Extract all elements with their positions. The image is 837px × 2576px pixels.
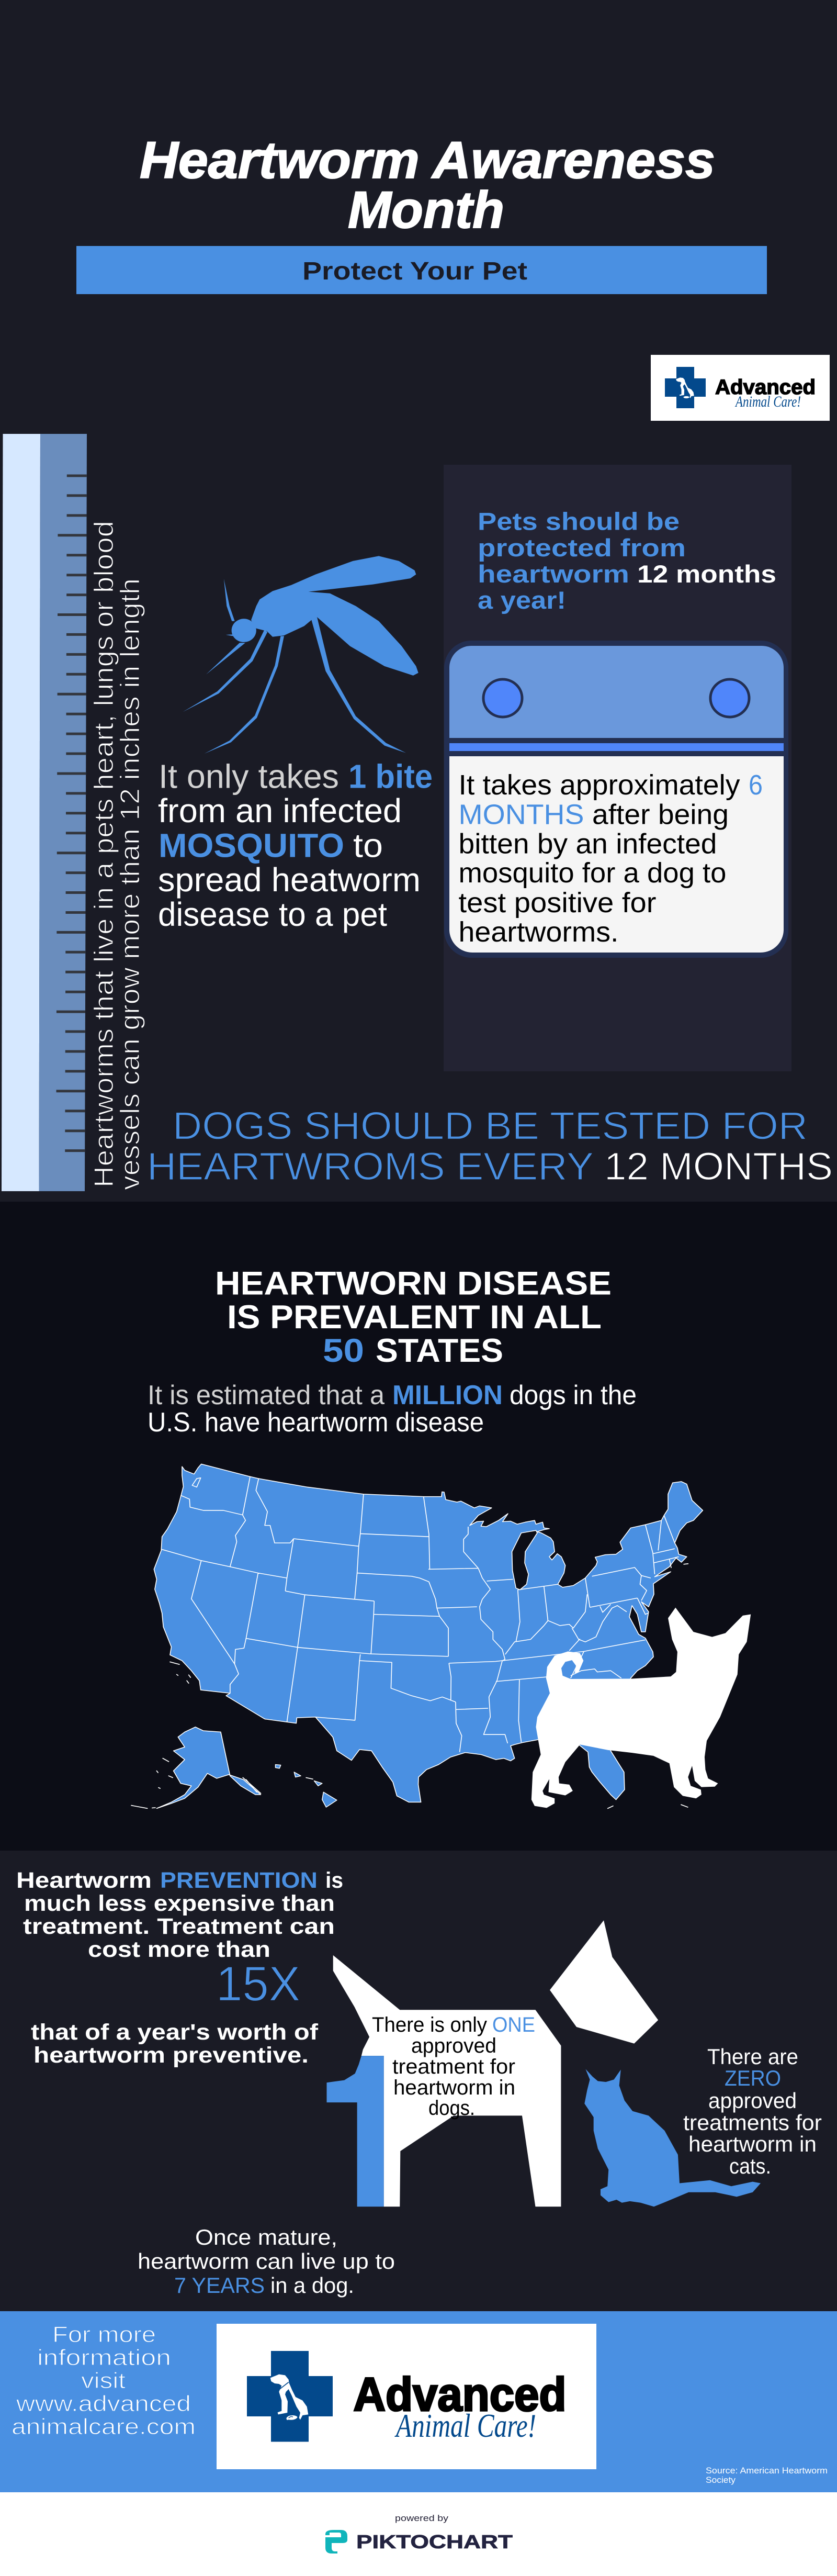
text: more information: www.advanced	[16, 2391, 191, 2416]
panel heading	[478, 508, 776, 614]
calendar text: mosquito for a dog to	[458, 857, 726, 889]
text: one approved treatment for dogs: heartworm in	[393, 2076, 515, 2099]
text: more information: For more	[52, 2322, 156, 2347]
calendar text: 6	[749, 769, 763, 801]
text: zero approved treatments for cats: treatments for	[683, 2110, 822, 2135]
logo: Advanced Animal Care (large)	[217, 2324, 596, 2469]
title	[140, 131, 715, 239]
text: source: Source: American Heartworm	[706, 2466, 828, 2476]
panel heading: 12 months	[637, 560, 776, 588]
text: one approved treatment for dogs	[372, 2013, 535, 2120]
logo: Advanced Animal Care (top): Animal Care!	[734, 393, 801, 410]
map: Hawaii	[276, 1765, 337, 1807]
text: 1 bite: MOSQUITO	[159, 827, 344, 865]
calendar	[444, 641, 788, 958]
map: Great Lakes	[512, 1530, 537, 1590]
text: more information: information	[37, 2345, 171, 2370]
heading: prevalent in all 50 states: IS PREVALENT IN ALL	[227, 1299, 602, 1336]
text: prevention is less expensive	[16, 1868, 343, 2068]
callout: test every 12 months: HEARTWROMS EVERY	[147, 1145, 594, 1188]
text: lifespan 7 years: Once mature,	[195, 2225, 337, 2249]
logo: Advanced Animal Care (large): Animal Care!	[394, 2407, 536, 2444]
rotated ruler caption: vessels can grow more than 12 inches in length	[115, 578, 145, 1190]
text: 1 bite	[158, 758, 433, 933]
panel: powered by	[0, 2492, 837, 2576]
number 1	[326, 2056, 384, 2207]
text: more information: visit	[81, 2368, 126, 2393]
icon: geometric dog with number 1	[326, 1920, 658, 2207]
text: prevention is less expensive: cost more than	[88, 1937, 270, 1962]
callout: test every 12 months: DOGS SHOULD BE TESTED FOR	[173, 1104, 808, 1148]
text: zero approved treatments for cats: There are	[707, 2044, 798, 2069]
subtitle banner: Protect Your Pet	[302, 257, 527, 285]
text: zero approved treatments for cats: approved	[708, 2088, 797, 2113]
panel: powered by: powered by	[395, 2513, 449, 2523]
text: more information	[12, 2322, 196, 2439]
icon: piktochart mark	[325, 2530, 347, 2553]
text: prevention is less expensive: Heartworm	[16, 1868, 152, 1893]
panel: protection	[444, 465, 791, 1071]
dog body	[333, 1955, 561, 2207]
dog head	[550, 1920, 658, 2044]
text: prevention is less expensive: PREVENTION	[160, 1868, 318, 1893]
text: one approved treatment for dogs: approved	[411, 2034, 496, 2057]
text: a million dogs	[148, 1380, 637, 1438]
callout: test every 12 months: 12 MONTHS	[604, 1145, 833, 1188]
logo: Advanced Animal Care (top)	[651, 355, 830, 421]
calendar text: bitten by an infected	[458, 828, 717, 860]
text: prevention is less expensive: that of a year's worth of	[31, 2020, 319, 2045]
text: lifespan 7 years: in a dog.	[270, 2273, 354, 2298]
text: zero approved treatments for cats: ZERO	[725, 2066, 781, 2090]
text: source: Society	[706, 2475, 736, 2485]
text: lifespan 7 years	[138, 2225, 395, 2298]
map: contiguous states	[154, 1464, 703, 1802]
text: 1 bite: from an infected	[158, 792, 402, 830]
callout: test every 12 months	[147, 1104, 833, 1188]
text: 1 bite: 1 bite	[348, 758, 433, 796]
panel heading: protected from	[478, 534, 686, 562]
panel heading: Pets should be	[478, 508, 680, 535]
panel: powered by: PIKTOCHART	[356, 2531, 513, 2552]
text: a million dogs: It is estimated that a	[148, 1380, 384, 1410]
text: lifespan 7 years: 7 YEARS	[174, 2273, 265, 2298]
text: lifespan 7 years: heartworm can live up to	[138, 2249, 395, 2273]
text: a million dogs: MILLION	[392, 1380, 503, 1410]
text: 1 bite: to	[353, 827, 383, 865]
calendar text: after being	[592, 799, 729, 830]
text: prevention is less expensive: is	[325, 1868, 343, 1893]
text: source	[706, 2466, 828, 2485]
map: United States	[131, 1464, 703, 1808]
logo: Advanced Animal Care (large): Advanced	[354, 2369, 566, 2421]
text: one approved treatment for dogs: There is only	[372, 2013, 487, 2036]
ruler	[2, 434, 87, 1191]
text: a million dogs: U.S. have heartworm disease	[148, 1407, 484, 1438]
icon: mosquito	[183, 556, 418, 754]
subtitle banner	[76, 246, 767, 294]
text: one approved treatment for dogs: dogs.	[428, 2097, 475, 2120]
title: Month	[348, 181, 504, 239]
text: one approved treatment for dogs: treatment for	[392, 2055, 515, 2078]
panel heading: a year!	[478, 586, 566, 614]
text: zero approved treatments for cats: heartworm in	[688, 2132, 817, 2156]
heading: prevalent in all 50 states: STATES	[376, 1332, 503, 1369]
rotated ruler caption: Heartworms that live in a pets heart, lungs or blood	[89, 521, 119, 1188]
stat: 15X: 15X	[216, 1956, 300, 2011]
map: small islands	[131, 1564, 688, 1808]
rotated ruler caption	[89, 521, 145, 1190]
title: Heartworm Awareness	[140, 131, 715, 189]
text: a million dogs: dogs in the	[510, 1380, 637, 1410]
calendar text: MONTHS	[458, 799, 584, 830]
logo: Advanced Animal Care (top): Advanced	[715, 376, 816, 399]
panel heading: heartworm	[478, 560, 629, 588]
heading: prevalent in all 50 states: 50	[323, 1332, 364, 1369]
text: 1 bite: disease to a pet	[158, 895, 387, 933]
calendar text: heartworms.	[458, 916, 618, 948]
calendar text: test positive for	[458, 887, 657, 919]
text: prevention is less expensive: much less expensive than	[24, 1891, 335, 1916]
text: prevention is less expensive: treatment. Treatment can	[23, 1914, 335, 1939]
text: prevention is less expensive: heartworm preventive.	[33, 2043, 309, 2068]
text: 1 bite: It only takes	[159, 758, 339, 796]
icon: white dog silhouette	[531, 1608, 751, 1808]
panel: footer band	[0, 2311, 837, 2492]
text: 1 bite: spread heatworm	[158, 861, 421, 899]
text: more information: animalcare.com	[12, 2414, 196, 2439]
text: zero approved treatments for cats: cats.	[729, 2154, 771, 2178]
heading: prevalent in all 50 states	[215, 1265, 612, 1369]
icon: cat	[584, 2069, 761, 2207]
calendar text	[458, 769, 763, 948]
text: zero approved treatments for cats	[683, 2044, 822, 2178]
map: state borders	[161, 1476, 678, 1752]
calendar text: It takes approximately	[458, 769, 740, 801]
text: one approved treatment for dogs: ONE	[492, 2013, 535, 2036]
heading: prevalent in all 50 states: HEARTWORN DISEASE	[215, 1265, 612, 1302]
map: Alaska	[156, 1727, 261, 1808]
